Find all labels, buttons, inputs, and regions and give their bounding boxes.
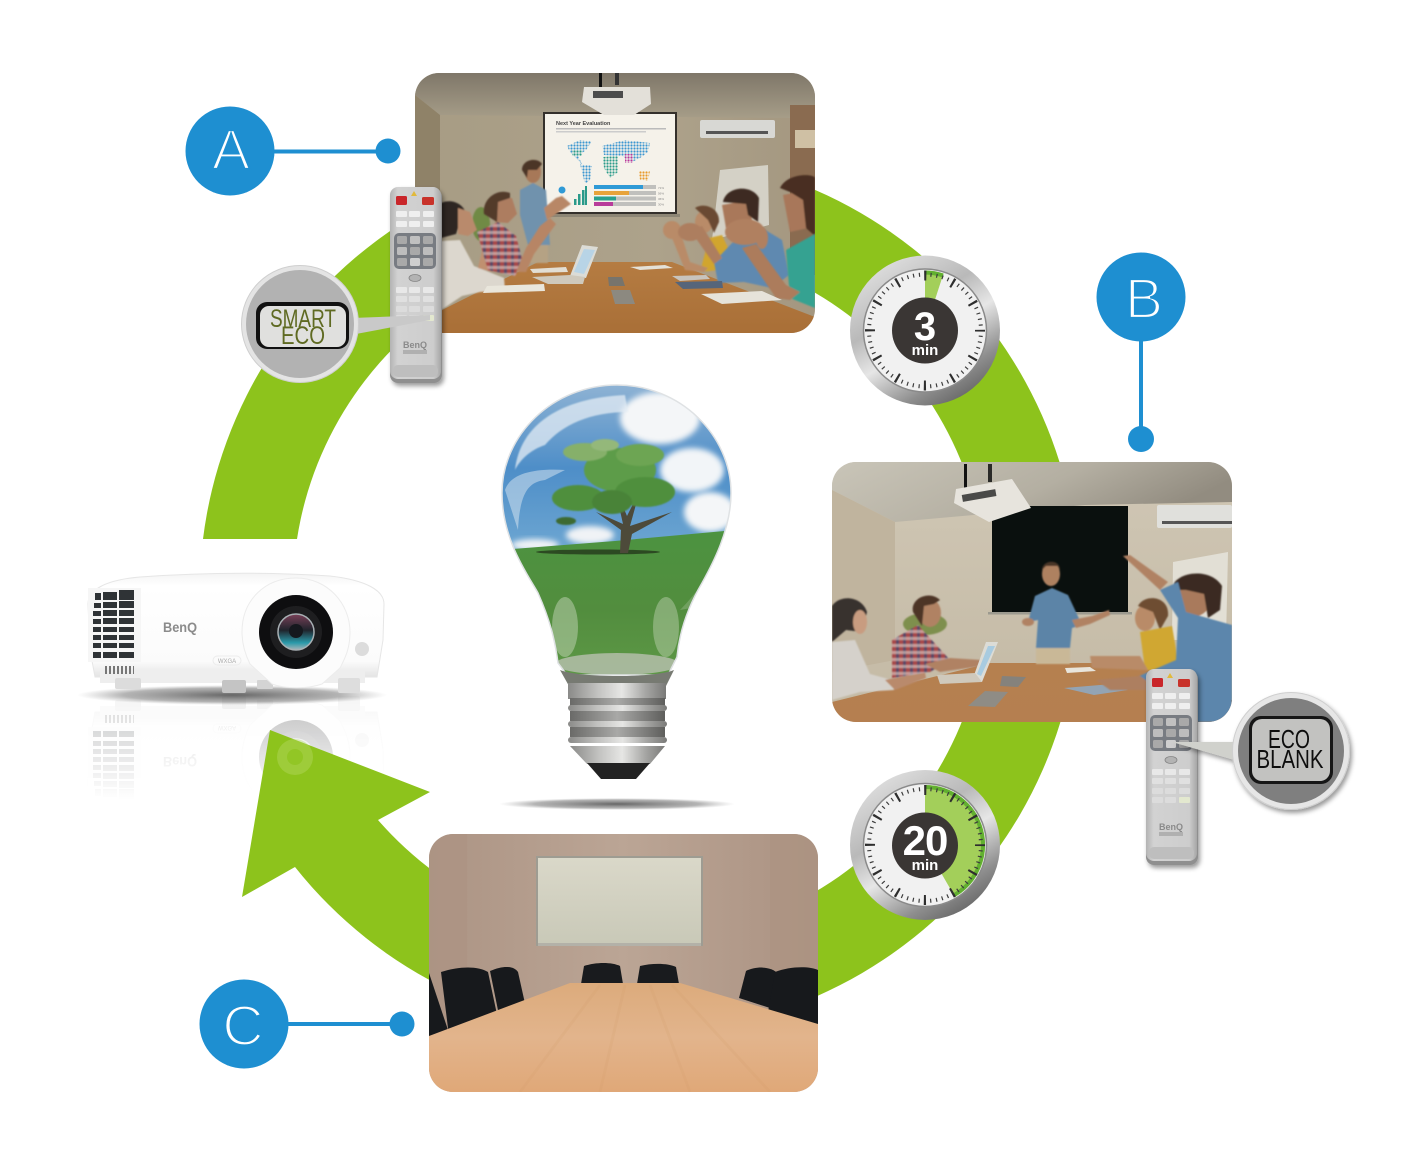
panel: photo A, meeting with projected screen [415,73,815,333]
label C with connector: C [222,994,264,1058]
remote control B [1146,669,1198,865]
seated woman, left [832,598,926,700]
laptop and table items [937,642,1128,707]
right-side woman, yellow top [663,206,729,272]
bulb screw base [560,670,674,779]
conference table [429,983,818,1092]
projector [77,573,387,705]
timer: 20 minutes: 20 [903,817,947,864]
left chairs [429,967,526,1040]
panel: photo C, empty meeting room [429,834,818,1092]
blank black screen [988,506,1132,614]
projection screen with map and bars: Next Year Evaluation [556,121,611,127]
air conditioner [1157,505,1232,528]
panel: photo B, meeting with blank screen [832,462,1232,722]
seated man, denim jacket, arm raised [1096,555,1232,722]
label C with connector [200,980,414,1068]
timer: 20 minutes: min [912,857,938,874]
projection screen with map and bars: 30% [658,202,664,206]
right chairs [739,967,818,1030]
air conditioner [700,120,775,138]
ceiling projector [954,464,1031,522]
right-side woman, teal top [725,175,815,308]
faint lens reflection on arrow [277,739,313,775]
callout: Eco Blank button [1172,692,1350,810]
timer: 20 minutes [850,770,1000,920]
callout: Eco Blank button: ECO [1268,724,1310,754]
label B with connector [1096,252,1186,452]
seated man, plaid shirt [477,192,556,276]
timer: 3 minutes [850,256,1000,406]
seated man, plaid shirt [892,596,982,678]
green cycle arrow [203,153,1080,1033]
label B with connector: B [1125,267,1163,331]
flipchart [712,165,769,240]
right-side man, denim shirt [678,189,789,288]
back chairs [581,963,679,984]
laptop and table items [483,245,782,304]
seated woman, white top [441,201,505,310]
central light bulb with tree and meadow [499,383,736,810]
seated woman, yellow top [1090,598,1180,672]
projection screen with map and bars: 56% [658,192,664,196]
label A with connector [186,106,400,196]
whiteboard [536,856,703,946]
presenter [520,160,571,263]
projection screen with map and bars: 36% [658,197,664,201]
callout: Smart Eco button: SMART [270,305,336,333]
projection screen with map and bars: 71% [658,186,664,190]
timer: 3 minutes: 3 [914,305,936,349]
plant [903,613,947,635]
ceiling projector [582,73,651,115]
flipchart [1172,552,1228,640]
timer: 3 minutes: min [912,342,938,359]
projection screen with map and bars [542,112,680,217]
callout: Smart Eco button [242,266,430,382]
tree [552,439,675,553]
presenter [1022,562,1110,664]
projector reflection [93,700,360,784]
plant [472,207,490,241]
callout: Eco Blank button: BLANK [1256,744,1324,774]
bulb outline [502,385,731,675]
label A with connector: A [212,118,250,182]
bulb glass scene [500,383,736,675]
callout: Smart Eco button: ECO [281,322,325,350]
remote control A [390,187,442,383]
